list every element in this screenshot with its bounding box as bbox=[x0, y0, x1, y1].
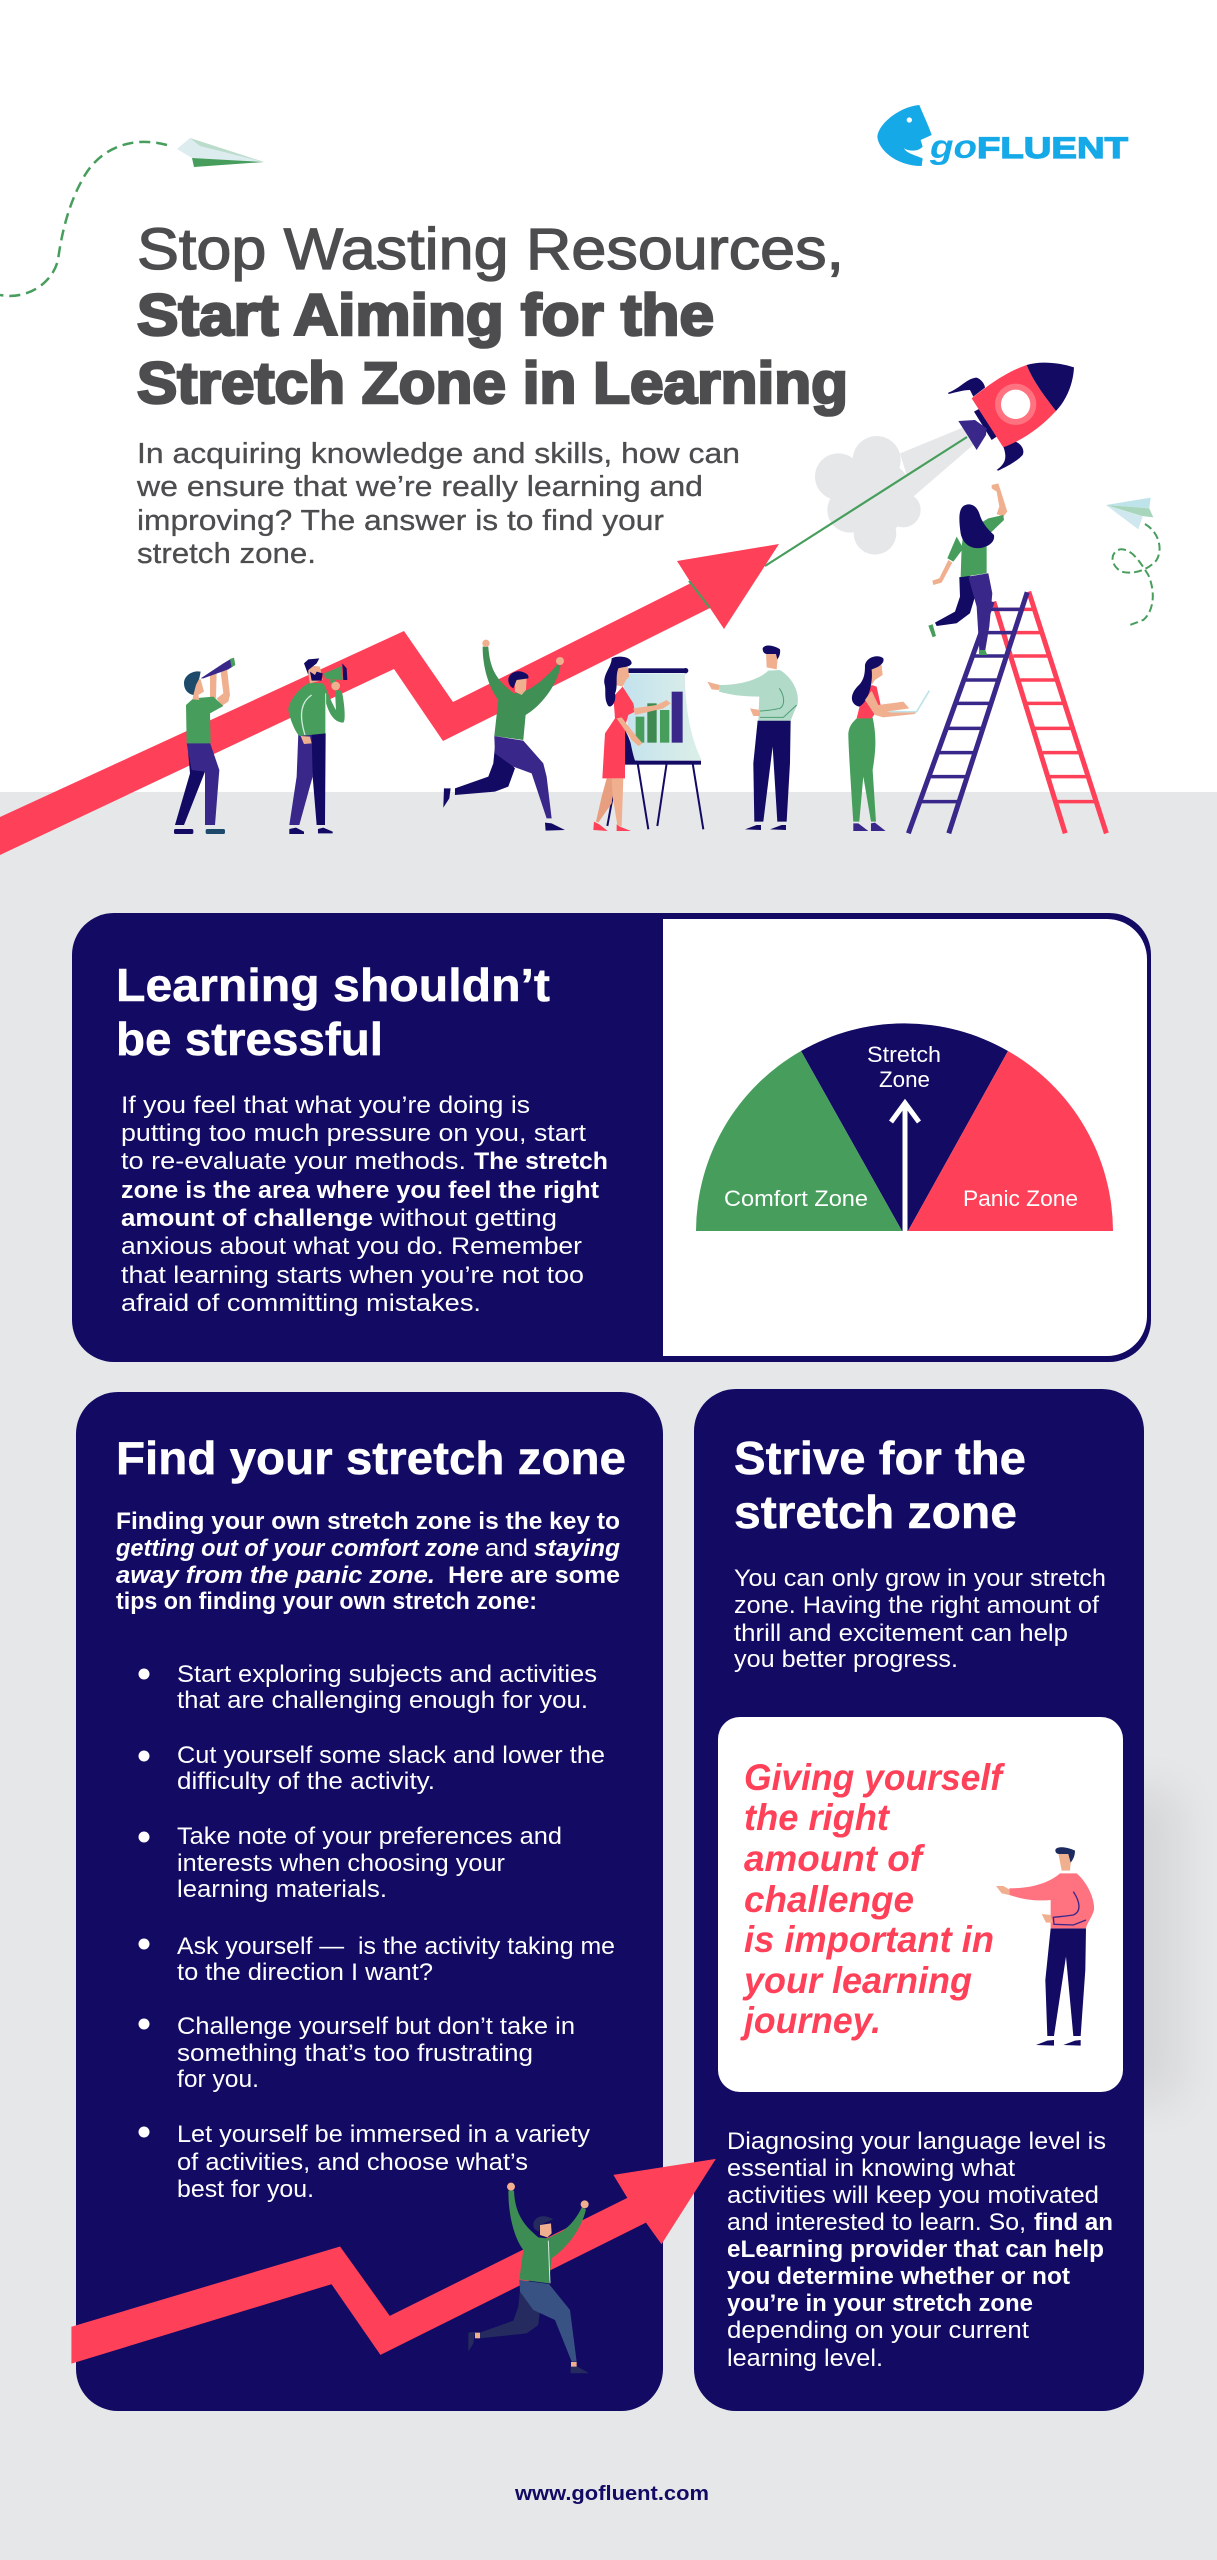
woman with laptop bbox=[848, 656, 929, 831]
body text: zone is the area where you feel the right bbox=[121, 1177, 599, 1204]
body text bbox=[734, 1565, 1106, 1673]
callout quote bbox=[740, 1757, 1006, 2041]
intro text: tips on finding your own stretch zone: bbox=[116, 1588, 537, 1615]
closing paragraph: and interested to learn. So, bbox=[727, 2209, 1026, 2236]
intro text: stretch zone. bbox=[137, 538, 316, 570]
callout quote: your learning bbox=[742, 1960, 972, 2001]
ladders bbox=[908, 592, 1106, 833]
intro text: Finding your own stretch zone is the key to bbox=[116, 1508, 620, 1535]
callout quote: challenge bbox=[744, 1879, 914, 1920]
closing paragraph: eLearning provider that can help bbox=[727, 2236, 1104, 2263]
callout quote: Giving yourself bbox=[744, 1757, 1006, 1798]
tip 5: something that’s too frustrating bbox=[177, 2040, 533, 2067]
closing paragraph bbox=[727, 2128, 1113, 2372]
smoke cloud bbox=[815, 427, 975, 555]
jumping person on arrow bbox=[468, 2183, 589, 2373]
tip 3 bbox=[138, 1823, 562, 1903]
callout quote: is important in bbox=[744, 1919, 994, 1960]
tip list bbox=[138, 1661, 615, 2203]
closing paragraph: you’re in your stretch zone bbox=[727, 2290, 1033, 2317]
tip 1: Start exploring subjects and activities bbox=[177, 1661, 597, 1688]
gauge labels: Zone bbox=[879, 1067, 930, 1092]
intro text bbox=[115, 1508, 620, 1615]
intro text: improving? The answer is to find your bbox=[137, 505, 664, 537]
paper plane right bbox=[1106, 498, 1160, 625]
person with telescope bbox=[174, 658, 235, 834]
body text: that learning starts when you’re not too bbox=[121, 1262, 584, 1289]
tip 6: of activities, and choose what’s bbox=[177, 2149, 528, 2176]
body text: You can only grow in your stretch bbox=[734, 1565, 1106, 1592]
tip 5: Challenge yourself but don’t take in bbox=[177, 2013, 575, 2040]
body text: putting too much pressure on you, start bbox=[121, 1120, 586, 1147]
logo: go bbox=[929, 128, 977, 165]
tip 3: learning materials. bbox=[177, 1876, 387, 1903]
closing paragraph: depending on your current bbox=[727, 2317, 1029, 2344]
gauge labels: Stretch bbox=[867, 1042, 941, 1067]
body text: If you feel that what you’re doing is bbox=[121, 1092, 530, 1119]
intro text: we ensure that we’re really learning and bbox=[136, 471, 703, 503]
gauge chart bbox=[696, 1023, 1113, 1231]
heading: learning shouldn't: Learning shouldn’t bbox=[116, 959, 550, 1011]
body text: zone. Having the right amount of bbox=[734, 1592, 1099, 1619]
rocket trail line bbox=[765, 437, 967, 566]
purple ladder bbox=[908, 592, 1027, 833]
tip 2: Cut yourself some slack and lower the bbox=[177, 1742, 605, 1769]
body text: you better progress. bbox=[734, 1646, 958, 1673]
logo: FLUENT bbox=[977, 132, 1128, 165]
tip 6 bbox=[138, 2121, 591, 2203]
panel: strive for the stretch zone bbox=[694, 1389, 1144, 2411]
intro text: getting out of your comfort zone bbox=[115, 1535, 479, 1562]
intro text: staying bbox=[534, 1535, 620, 1562]
panel: find your stretch zone bbox=[76, 1392, 663, 2411]
title: Stretch Zone in Learning bbox=[137, 351, 848, 416]
callout quote: the right bbox=[744, 1797, 891, 1838]
bottom growth arrow bbox=[71, 2159, 716, 2364]
gauge labels: Panic Zone bbox=[963, 1186, 1078, 1211]
tip 2 bbox=[138, 1742, 605, 1795]
tip 5 bbox=[138, 2013, 575, 2093]
growth arrow bbox=[0, 544, 779, 855]
flipchart with chart bbox=[607, 668, 703, 829]
closing paragraph: you determine whether or not bbox=[727, 2263, 1070, 2290]
website footer: www.gofluent.com bbox=[514, 2482, 709, 2505]
panel: learning shouldn't be stressful bbox=[72, 913, 1151, 1362]
body text bbox=[121, 1092, 608, 1317]
people group left bbox=[174, 640, 565, 834]
body text: The stretch bbox=[474, 1148, 608, 1175]
closing paragraph: essential in knowing what bbox=[727, 2155, 1015, 2182]
tip 1 bbox=[138, 1661, 597, 1714]
title: Stop Wasting Resources, bbox=[137, 217, 844, 282]
intro text: In acquiring knowledge and skills, how can bbox=[137, 438, 740, 470]
gauge labels bbox=[724, 1042, 1078, 1211]
callout quote: journey. bbox=[740, 2000, 881, 2041]
tip 4: to the direction I want? bbox=[177, 1959, 433, 1986]
closing paragraph: Diagnosing your language level is bbox=[727, 2128, 1106, 2155]
tip 1: that are challenging enough for you. bbox=[177, 1687, 588, 1714]
person with megaphone bbox=[288, 658, 347, 834]
icon: paper plane top left bbox=[177, 138, 264, 167]
tip 3: Take note of your preferences and bbox=[177, 1823, 562, 1850]
heading: strive for the stretch zone: Strive for the bbox=[734, 1432, 1026, 1484]
callout card bbox=[718, 1717, 1123, 2092]
rocket bbox=[948, 363, 1074, 471]
tip 6: best for you. bbox=[177, 2176, 314, 2203]
tip 6: Let yourself be immersed in a variety bbox=[177, 2121, 591, 2148]
heading: find your stretch zone: Find your stretch zone bbox=[116, 1432, 626, 1484]
intro text bbox=[136, 438, 740, 570]
intro text: away from the panic zone. bbox=[116, 1562, 435, 1589]
title: Start Aiming for the bbox=[137, 283, 714, 348]
heading: learning shouldn't: be stressful bbox=[116, 1013, 383, 1065]
man pointing in card bbox=[996, 1847, 1094, 2046]
closing paragraph: activities will keep you motivated bbox=[727, 2182, 1099, 2209]
body text: to re-evaluate your methods. bbox=[121, 1148, 466, 1175]
arrow bbox=[891, 1103, 919, 1231]
woman climbing ladder and right paper plane bbox=[928, 483, 1160, 655]
heading: strive for the stretch zone: stretch zone bbox=[734, 1486, 1017, 1538]
people group right bbox=[593, 646, 929, 831]
woman climbing bbox=[928, 483, 1007, 655]
gauge labels: Comfort Zone bbox=[724, 1186, 868, 1211]
man pointing bbox=[707, 646, 798, 830]
intro text: and bbox=[485, 1535, 528, 1562]
tip 2: difficulty of the activity. bbox=[177, 1768, 435, 1795]
soft shadow bbox=[1090, 1790, 1180, 2100]
heading: learning shouldn't bbox=[116, 959, 550, 1065]
title bbox=[137, 217, 848, 416]
tip 4 bbox=[138, 1933, 615, 1986]
red ladder bbox=[994, 592, 1106, 833]
icon: dashed flight path left bbox=[0, 142, 167, 296]
body text: afraid of committing mistakes. bbox=[121, 1290, 481, 1317]
callout quote: amount of bbox=[744, 1838, 926, 1879]
body text: amount of challenge bbox=[121, 1205, 373, 1232]
body text: thrill and excitement can help bbox=[734, 1620, 1068, 1647]
body text: anxious about what you do. Remember bbox=[121, 1233, 582, 1260]
closing paragraph: learning level. bbox=[727, 2345, 883, 2372]
tip 4: Ask yourself — is the activity taking me bbox=[177, 1933, 615, 1960]
heading: strive for the stretch zone bbox=[734, 1432, 1026, 1538]
tip 5: for you. bbox=[177, 2066, 259, 2093]
closing paragraph: find an bbox=[1034, 2209, 1113, 2236]
jumping person bbox=[443, 640, 565, 831]
body text: without getting bbox=[379, 1205, 557, 1232]
tip 3: interests when choosing your bbox=[177, 1850, 505, 1877]
woman presenting bbox=[593, 657, 671, 831]
logo bbox=[877, 105, 1128, 166]
intro text: Here are some bbox=[448, 1562, 620, 1589]
